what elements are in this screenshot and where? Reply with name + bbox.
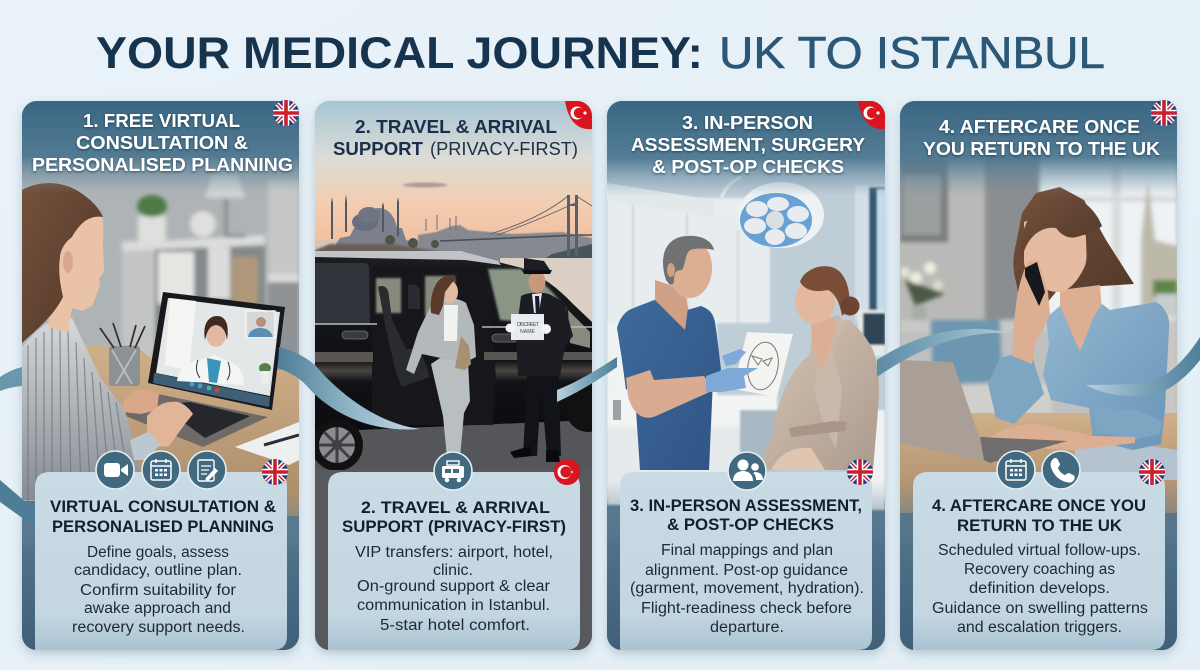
on-screen doctor	[177, 316, 244, 385]
ribbon: step 2 to step 3	[557, 357, 617, 402]
laptop	[900, 360, 1067, 463]
icon: people	[728, 452, 766, 490]
heading: step 2: (PRIVACY-FIRST)	[430, 139, 578, 159]
title: UK TO ISTANBUL	[719, 29, 1105, 78]
table	[900, 413, 1177, 513]
ribbon: left edge lower	[0, 480, 35, 527]
info box: step 4: definition develops.	[969, 580, 1110, 597]
icon: UK flag	[846, 458, 874, 486]
info box: step 1: Confirm suitability for	[80, 582, 236, 599]
face mapping chart	[733, 332, 793, 397]
illustration: woman on phone at home	[900, 101, 1177, 650]
heading: step 1	[32, 111, 293, 175]
info box: step 2: clinic.	[433, 562, 473, 579]
seat	[378, 286, 430, 387]
chauffeur with discreet name sign	[506, 258, 573, 462]
illustration: woman on video call at desk	[22, 101, 299, 650]
surgical lamp	[607, 177, 824, 248]
heading: step 4: 4. AFTERCARE ONCE	[939, 117, 1140, 137]
icon: Turkish flag corner	[858, 101, 885, 129]
ribbon: step 3 to step 4	[877, 329, 1010, 377]
desk	[85, 345, 299, 516]
info box: step 4: Recovery coaching as	[964, 561, 1115, 578]
icon: Turkish flag	[554, 459, 580, 485]
panel: step 4 aftercare	[900, 99, 1178, 650]
info box: step 2: 5-star hotel comfort.	[380, 617, 530, 634]
panel: step 3 in-person assessment	[607, 101, 885, 650]
icon: notepad and pen	[188, 451, 226, 489]
info box: step 1: recovery support needs.	[72, 619, 245, 636]
ribbon: left edge upper	[0, 367, 22, 391]
info box: step 2: SUPPORT (PRIVACY-FIRST)	[342, 518, 566, 536]
heading: step 3: & POST-OP CHECKS	[652, 157, 844, 177]
surgeon	[617, 236, 758, 470]
skyline	[315, 194, 592, 270]
info box: step 3: 3. IN-PERSON ASSESSMENT,	[630, 497, 862, 515]
heading: step 2: 2. TRAVEL & ARRIVAL	[355, 117, 557, 137]
info box: step 2: On-ground support & clear	[357, 578, 550, 595]
info box: step 4: Scheduled virtual follow-ups.	[938, 542, 1141, 559]
illustration: van, chauffeur and Istanbul skyline	[311, 101, 610, 650]
heading: step 3: ASSESSMENT, SURGERY	[631, 135, 865, 155]
heading: step 3	[631, 113, 865, 177]
heading: step 2	[333, 117, 578, 159]
icon: UK flag corner	[272, 99, 300, 127]
info box: step 1: awake approach and	[84, 600, 231, 617]
icon: phone	[1042, 451, 1080, 489]
info box: step 4: and escalation triggers.	[957, 619, 1122, 636]
info box: step 3: & POST-OP CHECKS	[667, 516, 834, 534]
water	[500, 258, 592, 322]
info box: step 3: Flight-readiness check before	[641, 600, 852, 617]
woman in grey suit	[406, 276, 476, 462]
icon: UK flag corner	[1150, 99, 1178, 127]
patient in robe	[760, 266, 879, 470]
title	[96, 29, 1105, 78]
info box: step 3: Final mappings and plan	[661, 542, 833, 559]
heading: step 1: CONSULTATION &	[76, 133, 248, 153]
illustration: surgeon and patient in clinic	[607, 101, 885, 650]
info box: step 2: VIP transfers: airport, hotel,	[355, 544, 553, 561]
heading: step 3: 3. IN-PERSON	[682, 113, 813, 133]
heading: step 4: YOU RETURN TO THE UK	[923, 139, 1160, 159]
woman	[987, 187, 1169, 450]
info box: step 2	[328, 472, 580, 650]
van body	[312, 251, 610, 432]
info box: step 4: Guidance on swelling patterns	[932, 600, 1148, 617]
wheel	[315, 427, 363, 470]
ribbon: step 4 right edge	[1086, 337, 1200, 396]
info box: step 3	[620, 472, 872, 650]
info box: step 4: RETURN TO THE UK	[957, 517, 1122, 535]
icon: UK flag	[261, 458, 289, 486]
info box: step 3: (garment, movement, hydration).	[630, 580, 864, 597]
heading: step 4	[923, 117, 1160, 159]
heading: step 1: PERSONALISED PLANNING	[32, 155, 293, 175]
info box: step 2: 2. TRAVEL & ARRIVAL	[361, 499, 550, 517]
title: YOUR MEDICAL JOURNEY:	[96, 29, 703, 78]
pencil cup	[100, 323, 145, 386]
woman	[22, 183, 193, 505]
panel: step 2 travel and arrival	[311, 101, 610, 650]
notebook	[235, 422, 299, 465]
icon: video camera	[96, 451, 134, 489]
icon: UK flag	[1138, 458, 1166, 486]
top heading gradient	[22, 101, 299, 193]
icon: Turkish flag corner	[565, 101, 592, 129]
info box: step 1: PERSONALISED PLANNING	[52, 518, 274, 536]
distant hills	[417, 224, 592, 262]
icon: transfer van	[434, 452, 472, 490]
ribbon: step 1 to step 2	[278, 347, 420, 430]
chauffeur with discreet name sign: NAME	[520, 329, 536, 335]
info box: step 2: communication in Istanbul.	[357, 597, 550, 614]
info box: step 3: departure.	[710, 619, 784, 636]
chauffeur with discreet name sign: DISCREET	[517, 322, 540, 328]
info box: step 1: candidacy, outline plan.	[74, 562, 242, 579]
info box: step 1: Define goals, assess	[87, 544, 229, 561]
info box: step 4	[913, 472, 1165, 650]
info box: step 1	[35, 472, 287, 650]
info box: step 3: alignment. Post-op guidance	[645, 562, 848, 579]
heading: step 1: 1. FREE VIRTUAL	[83, 111, 240, 131]
road	[315, 410, 592, 500]
icon: calendar	[142, 451, 180, 489]
heading: step 2: SUPPORT	[333, 139, 423, 159]
Blue Mosque silhouette	[331, 194, 418, 252]
info box: step 4: 4. AFTERCARE ONCE YOU	[932, 497, 1146, 515]
top heading gradient	[900, 101, 1177, 196]
icon: calendar	[997, 451, 1035, 489]
top heading gradient	[607, 101, 885, 196]
panel: step 1 virtual consultation	[22, 99, 300, 650]
info box: step 1: VIRTUAL CONSULTATION &	[50, 498, 276, 516]
laptop	[118, 292, 285, 447]
